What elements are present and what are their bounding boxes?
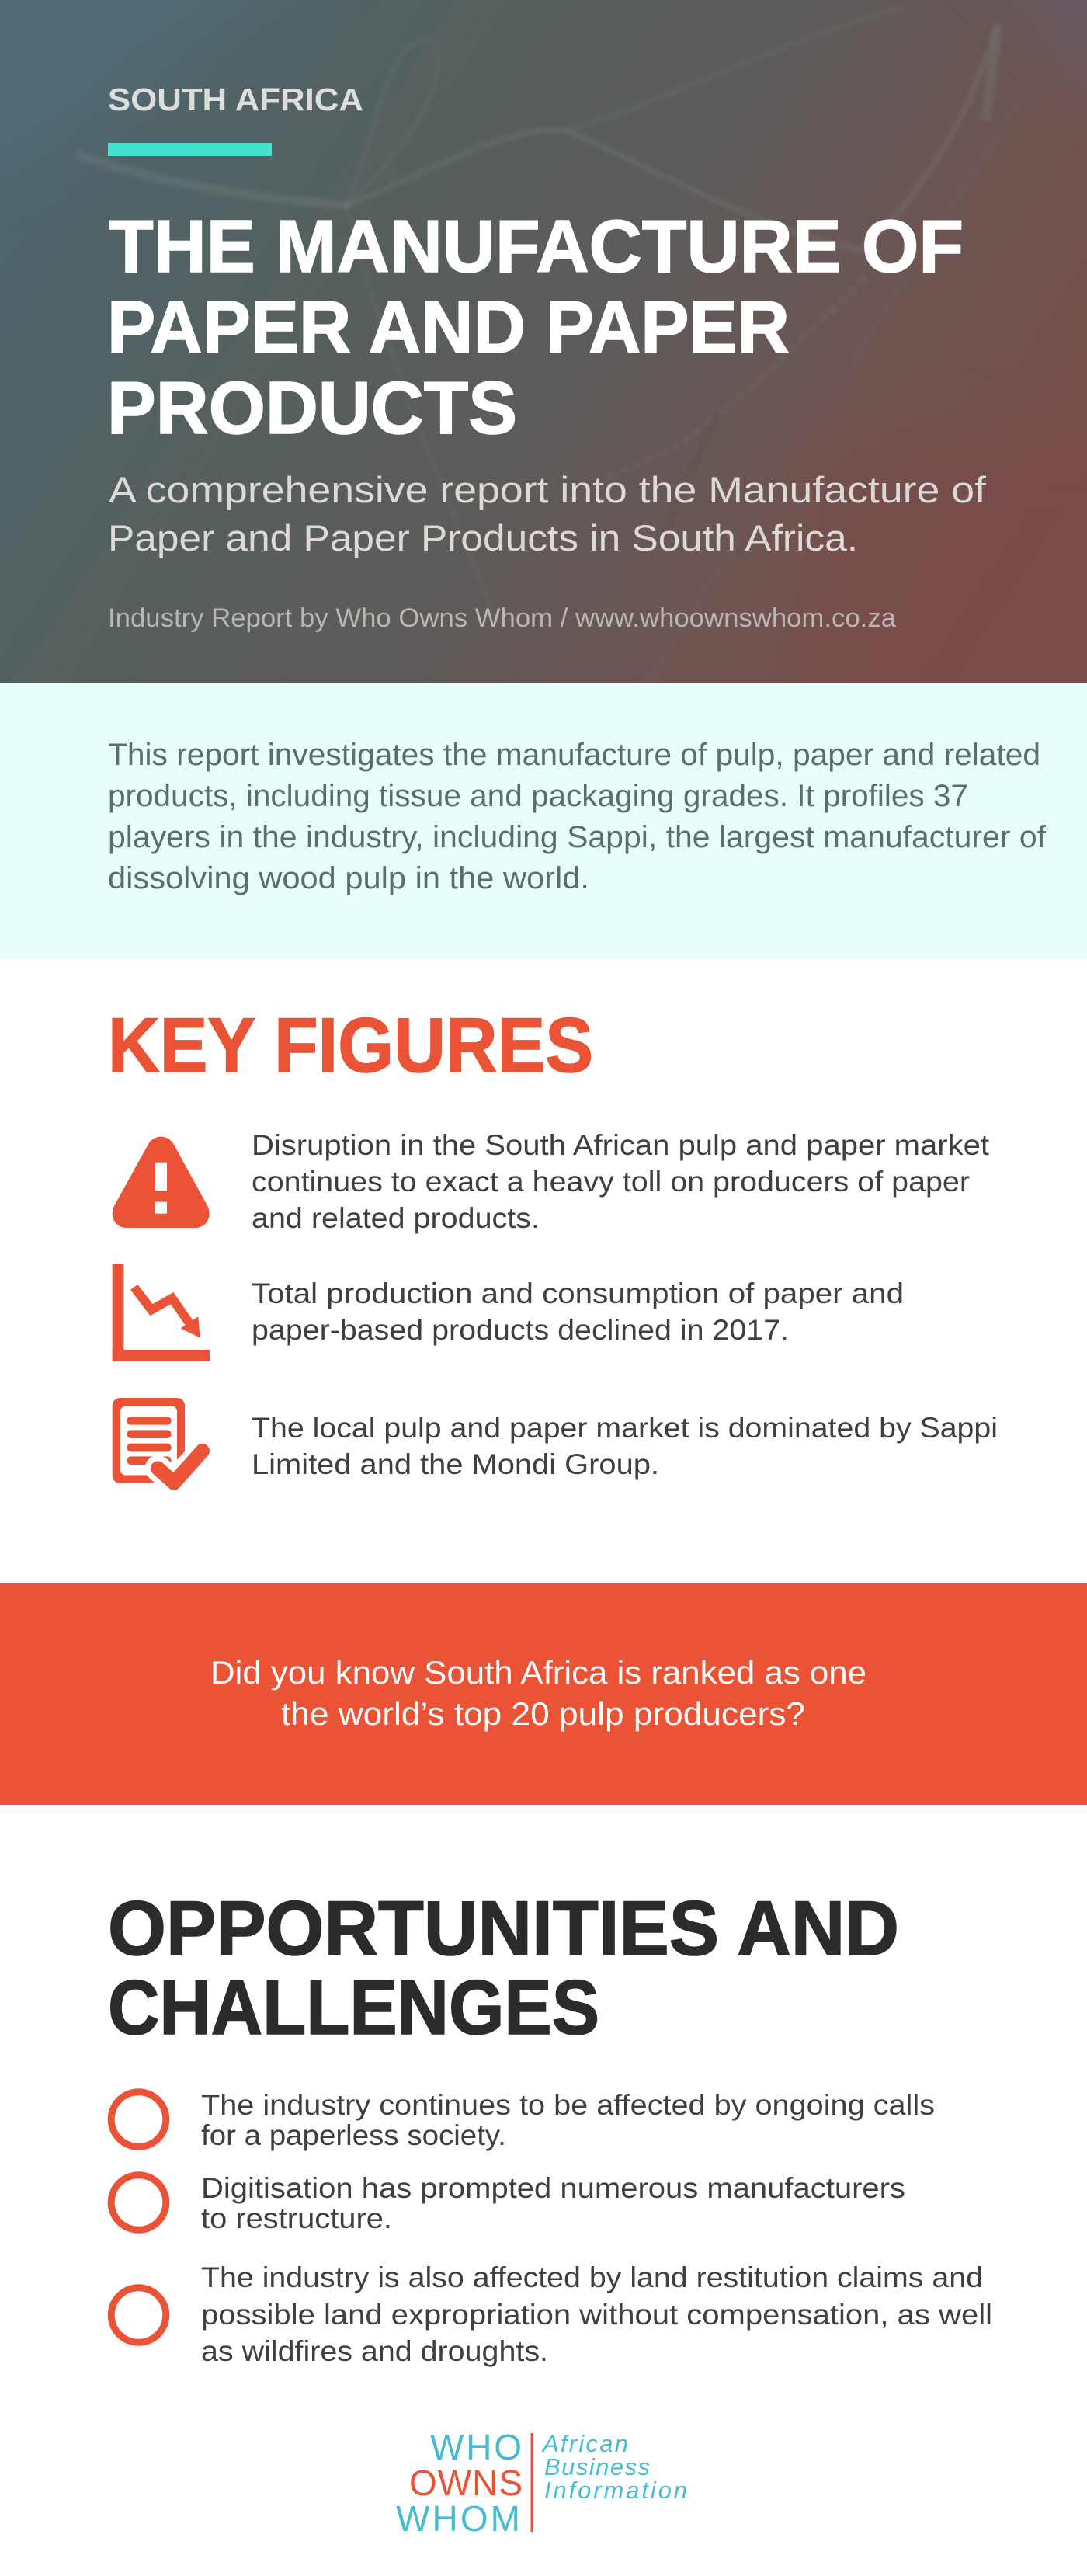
- title: PAPER AND PAPER: [107, 286, 790, 369]
- text: digitisation: to restructure.: [201, 2202, 392, 2234]
- heading: opportunities and challenges: OPPORTUNITIES AND: [108, 1885, 899, 1971]
- icon: bullet ring 1: [111, 2092, 166, 2147]
- title: THE MANUFACTURE OF: [109, 205, 964, 288]
- panel: hero header: [0, 0, 1087, 683]
- icon: warning triangle: [113, 1137, 210, 1228]
- logo: Who Owns Whom: WHOM: [396, 2498, 520, 2539]
- text: production decline: Total production and consumption of paper and: [252, 1277, 904, 1309]
- panel: intro summary: [0, 683, 1087, 958]
- logo: Who Owns Whom: Information: [544, 2477, 687, 2504]
- text: digitisation: [201, 2171, 905, 2234]
- icon: bullet ring 3: [111, 2288, 166, 2342]
- text: market dominance: Limited and the Mondi Group.: [252, 1448, 659, 1480]
- callout: did you know: [0, 1583, 1087, 1805]
- text: production decline: [252, 1277, 904, 1346]
- text: land restitution: possible land expropriation without compensation, as well: [201, 2298, 992, 2331]
- subtitle: [108, 469, 987, 558]
- logo: Who Owns Whom: WHO: [430, 2427, 522, 2467]
- text: paperless society: The industry continues to be affected by ongoing calls: [201, 2088, 935, 2121]
- text: market dominance: [252, 1411, 998, 1480]
- heading: opportunities and challenges: [108, 1885, 899, 2050]
- logo: Who Owns Whom: African: [541, 2430, 628, 2457]
- logo: Who Owns Whom: Business: [544, 2453, 650, 2480]
- title: PRODUCTS: [107, 367, 517, 450]
- intro text: products, including tissue and packaging grades. It profiles 37: [108, 779, 968, 813]
- intro text: players in the industry, including Sappi, the largest manufacturer of: [108, 820, 1047, 854]
- eyebrow: South Africa: SOUTH AFRICA: [108, 82, 363, 117]
- text: market disruption: continues to exact a heavy toll on producers of paper: [252, 1165, 970, 1198]
- callout: did you know: the world’s top 20 pulp producers?: [281, 1695, 805, 1732]
- icon: declining chart: [113, 1264, 210, 1361]
- hero background: photo of tied paper parcel under colour overlay: [0, 0, 1087, 683]
- intro text: [108, 738, 1047, 895]
- text: land restitution: as wildfires and droughts.: [201, 2334, 548, 2367]
- text: market disruption: Disruption in the South African pulp and paper market: [252, 1128, 990, 1161]
- text: paperless society: for a paperless society.: [201, 2119, 506, 2151]
- heading: opportunities and challenges: CHALLENGES: [108, 1964, 599, 2050]
- title: [107, 205, 964, 450]
- text: land restitution: [201, 2261, 992, 2367]
- text: digitisation: Digitisation has prompted numerous manufacturers: [201, 2171, 905, 2204]
- intro text: This report investigates the manufacture of pulp, paper and related: [108, 738, 1040, 772]
- intro text: dissolving wood pulp in the world.: [108, 861, 589, 895]
- report credit: Industry Report by Who Owns Whom / www.whoownswhom.co.za: [108, 603, 896, 633]
- text: market disruption: and related products.: [252, 1201, 540, 1234]
- icon: bullet ring 2: [111, 2175, 166, 2230]
- callout: did you know: Did you know South Africa is ranked as one: [210, 1654, 866, 1691]
- subtitle: Paper and Paper Products in South Africa.: [108, 517, 858, 558]
- logo: Who Owns Whom: OWNS: [409, 2463, 523, 2503]
- text: land restitution: The industry is also affected by land restitution claims and: [201, 2261, 983, 2293]
- text: market disruption: [252, 1128, 990, 1234]
- accent bar: [108, 143, 272, 156]
- subtitle: A comprehensive report into the Manufacture of: [109, 469, 987, 510]
- text: market dominance: The local pulp and paper market is dominated by Sappi: [252, 1411, 998, 1444]
- heading: key figures: KEY FIGURES: [108, 1002, 593, 1088]
- icon: document with check mark: [113, 1398, 203, 1483]
- logo: Who Owns Whom: [396, 2427, 687, 2539]
- text: paperless society: [201, 2088, 935, 2151]
- text: production decline: paper-based products declined in 2017.: [252, 1313, 789, 1346]
